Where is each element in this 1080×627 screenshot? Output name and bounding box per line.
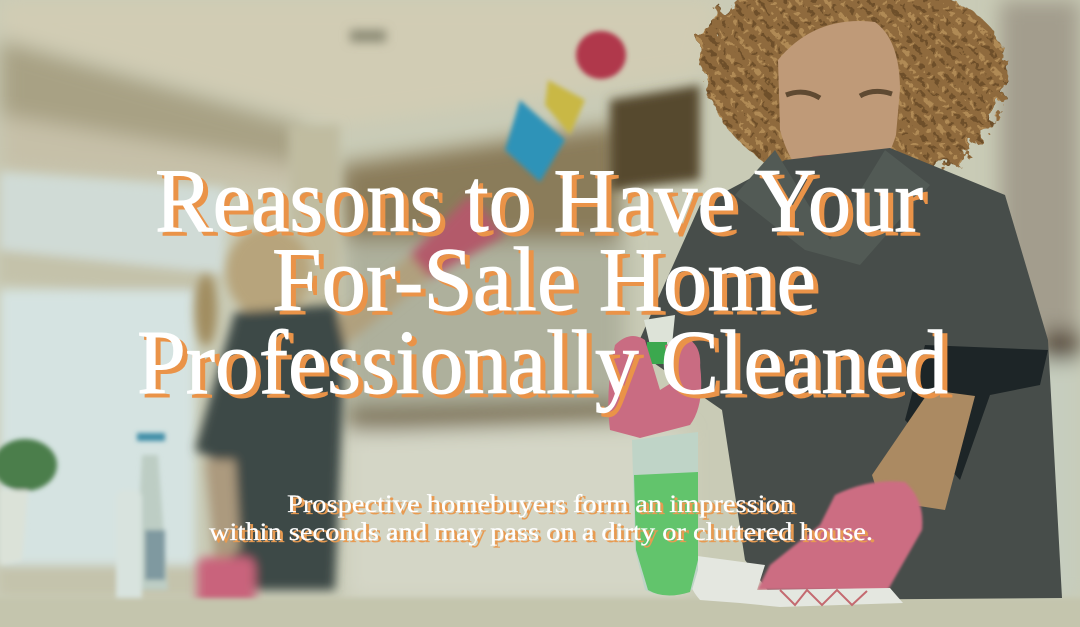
spray bottle [632,432,698,595]
face [778,21,900,190]
white cloth [688,555,903,607]
dark sleeve [905,345,1048,480]
arm [872,390,975,510]
blurred second cleaner [195,195,505,627]
pink glove wiping [757,481,922,595]
blurred plant and bottles [0,433,168,627]
subtitle [209,491,873,546]
blurred duster [505,31,655,182]
title: For-Sale Home [272,229,816,330]
title: Professionally Cleaned [137,312,948,413]
woman [608,0,1062,607]
title: Reasons to Have Your [155,150,923,251]
neck [805,165,885,262]
title [137,150,948,413]
hair [700,0,1005,170]
subtitle: within seconds and may pass on a dirty or cluttered house. [209,519,873,546]
counter [0,598,1080,627]
subtitle: Prospective homebuyers form an impression [287,491,795,518]
grey polo shirt [635,148,1062,600]
pink glove on bottle [608,336,701,438]
